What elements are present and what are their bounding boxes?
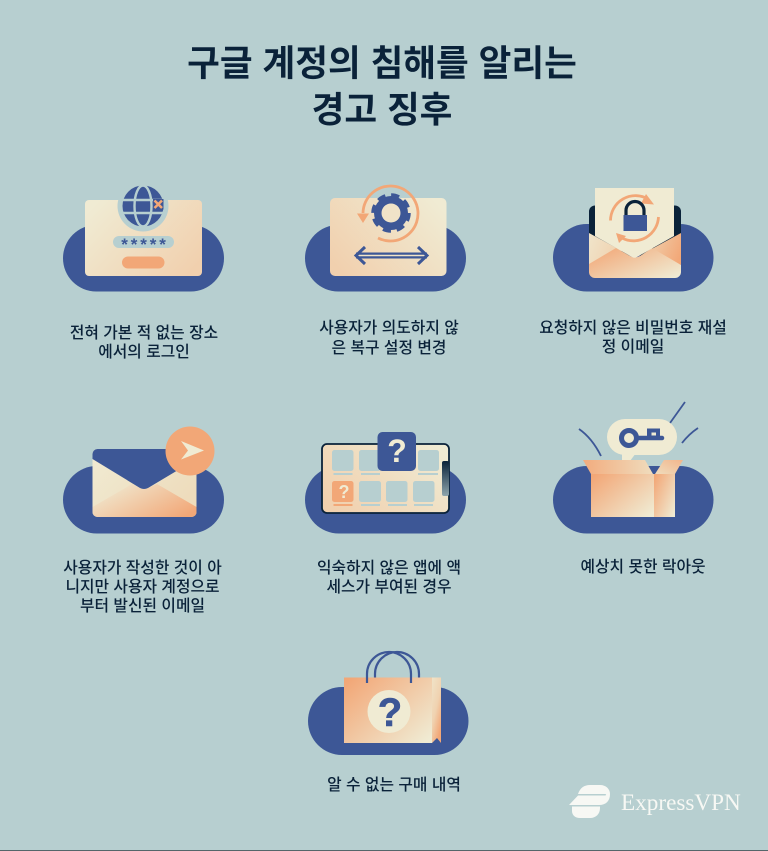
text: email you did not write: 니지만 사용자 계정으로 [65, 578, 220, 596]
text: email you did not write [63, 559, 222, 615]
text: unfamiliar app access [317, 559, 461, 596]
text: recovery settings change [319, 319, 459, 357]
icon: recovery settings change [305, 186, 466, 292]
text: recovery settings change: 은 복구 설정 변경 [332, 339, 446, 357]
text: unrequested password reset email: 요청하지 않은 비밀번호 재설 [539, 319, 727, 337]
text: login from unknown location [70, 324, 218, 361]
text: email you did not write: 사용자가 작성한 것이 아 [63, 559, 222, 577]
icon: unfamiliar app access [305, 432, 466, 534]
icon: email you did not write [63, 426, 224, 534]
icon: unknown purchase history [308, 652, 468, 755]
text: unknown purchase history: 알 수 없는 구매 내역 [327, 776, 461, 794]
icon: unfamiliar app access: ? [338, 482, 350, 502]
text: login from unknown location: 전혀 가본 적 없는 장소 [70, 324, 218, 342]
title: 경고 징후 [312, 90, 452, 130]
icon: login from unknown location: ***** [121, 235, 169, 254]
text: unrequested password reset email [539, 319, 727, 356]
icon: unfamiliar app access: ? [387, 433, 407, 469]
icon: unexpected lockout [553, 402, 714, 534]
logo: ExpressVPN [569, 785, 741, 818]
text: recovery settings change: 사용자가 의도하지 않 [319, 319, 459, 337]
icon: unknown purchase history: ? [378, 691, 402, 735]
text: unfamiliar app access: 세스가 부여된 경우 [326, 578, 452, 596]
text: unrequested password reset email: 정 이메일 [602, 338, 664, 356]
text: email you did not write: 부터 발신된 이메일 [80, 597, 205, 615]
logo: ExpressVPN: ExpressVPN [621, 790, 741, 816]
text: login from unknown location: 에서의 로그인 [98, 343, 190, 361]
title: 구글 계정의 침해를 알리는 [187, 44, 577, 84]
text: unexpected lockout: 예상치 못한 락아웃 [580, 558, 706, 576]
text: unfamiliar app access: 익숙하지 않은 앱에 액 [317, 559, 461, 577]
icon: login from unknown location [63, 180, 224, 292]
title [187, 44, 577, 130]
icon: unrequested password reset email [553, 188, 714, 292]
